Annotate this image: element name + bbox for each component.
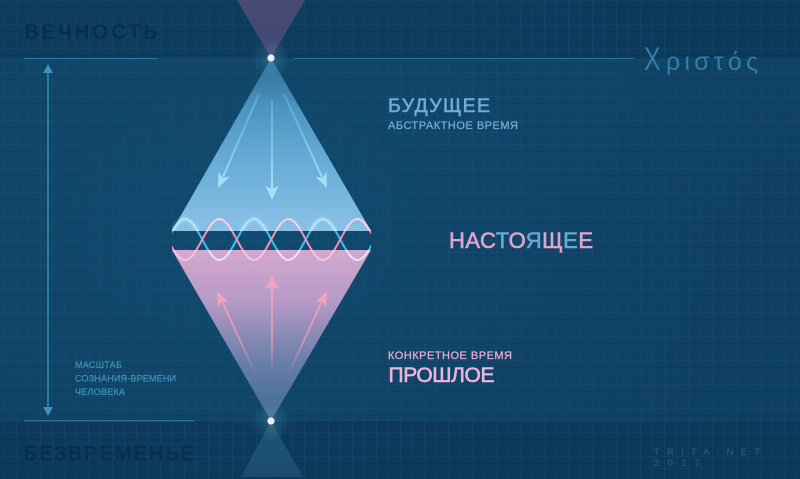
bottom boundary line xyxy=(24,420,194,421)
bottom band label: timelessness: БЕЗВРЕМЕНЬЕ xyxy=(24,443,194,465)
subheading: concrete time: КОНКРЕТНОЕ ВРЕМЯ xyxy=(388,350,512,362)
future triangle xyxy=(172,58,371,231)
interwoven waves xyxy=(172,216,371,261)
top boundary line right xyxy=(294,58,634,59)
heading: past xyxy=(388,350,512,387)
top band label: eternity: ВЕЧНОСТЬ xyxy=(25,22,157,44)
subheading: abstract time: АБСТРАКТНОЕ ВРЕМЯ xyxy=(388,120,518,132)
blue wave on pink band xyxy=(207,250,370,261)
credit: 2017 xyxy=(654,458,700,469)
pink wave in gap xyxy=(172,231,371,250)
pink wave on blue band xyxy=(206,218,371,231)
arrows: upward past xyxy=(217,275,327,373)
credit: TRITA.NET xyxy=(654,447,760,458)
credit xyxy=(654,447,760,469)
lower cone below timeless point xyxy=(241,421,303,477)
greek title: Χ xyxy=(644,42,661,78)
bottom point xyxy=(251,401,291,441)
blue wave glow xyxy=(172,216,338,231)
scale caption: СОЗНАНИЯ-ВРЕМЕНИ xyxy=(75,374,176,384)
scale caption: МАСШТАБ xyxy=(75,360,122,370)
greek title: ριστός xyxy=(666,48,758,76)
scale arrow xyxy=(43,64,53,416)
blue wave on blue band xyxy=(172,218,336,231)
heading: past: ПРОШЛОЕ xyxy=(388,364,494,387)
arrows: downward future xyxy=(218,94,327,200)
top boundary line left xyxy=(24,58,158,59)
upper cone above eternity point xyxy=(237,0,305,58)
top point xyxy=(251,38,291,78)
past triangle xyxy=(172,250,371,421)
greek title xyxy=(644,42,758,78)
heading: present: НАСТОЯЩЕЕ xyxy=(449,228,593,253)
blue wave in gap xyxy=(172,231,371,250)
pink wave on pink band xyxy=(172,250,336,261)
heading: future xyxy=(388,95,518,132)
heading: future: БУДУЩЕЕ xyxy=(388,95,490,117)
scale caption xyxy=(75,360,176,397)
scale caption: ЧЕЛОВЕКА xyxy=(75,387,125,397)
